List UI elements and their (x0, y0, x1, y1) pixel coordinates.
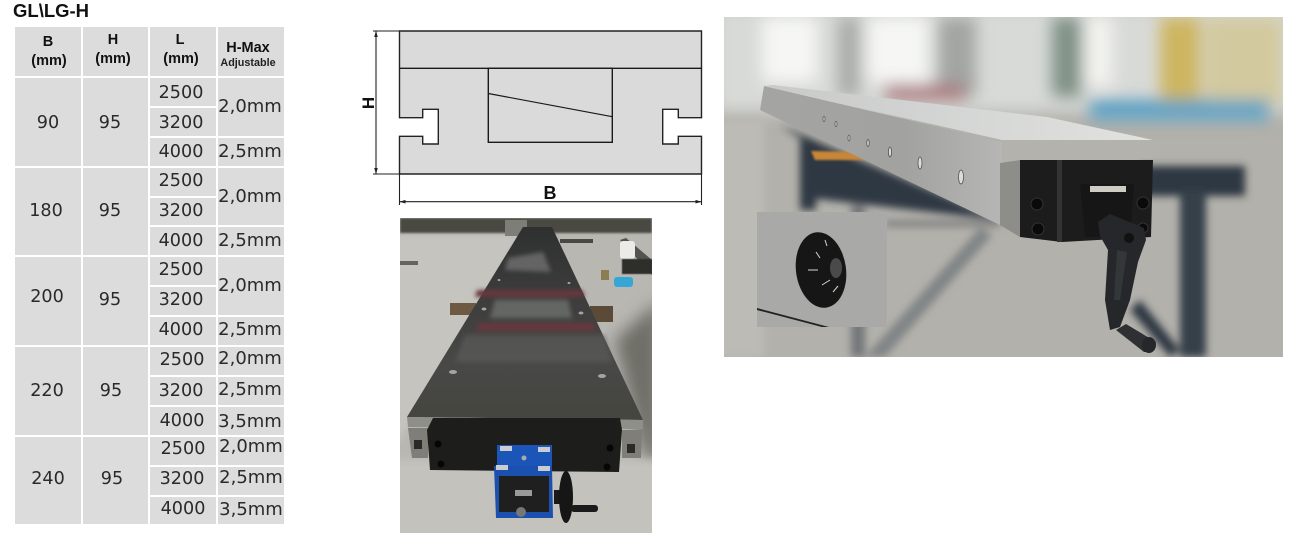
row group B 90: 95 (99, 113, 121, 133)
table header: B (43, 34, 53, 50)
row group B 240: 3,5mm (219, 499, 283, 520)
row group B 220: 2500 (160, 350, 204, 370)
row group B 90: 3200 (159, 113, 203, 133)
row group B 180: 2,5mm (218, 230, 282, 251)
row group B 180: 2,0mm (218, 186, 282, 207)
dimension H: H (359, 97, 378, 109)
hand wheel (554, 471, 598, 523)
row group B 220 (15, 347, 284, 435)
row group B 180: 95 (99, 201, 121, 221)
wooden supports (450, 303, 613, 322)
black end block (1020, 160, 1153, 242)
row group B 220: 220 (30, 381, 64, 401)
cross-section diagram (359, 31, 702, 205)
row group B 90: 2500 (159, 83, 203, 103)
row group B 240: 2,5mm (219, 467, 283, 488)
profile shape (400, 31, 702, 174)
row group B 90: 2,0mm (218, 96, 282, 117)
beam side face (760, 86, 1002, 225)
dimension H (359, 31, 400, 174)
beam end plate (1002, 140, 1153, 163)
reflections (455, 252, 612, 362)
row group B 180: 180 (29, 201, 63, 221)
photo: front view of table with blue gearbox (390, 218, 660, 540)
row group B 180 (15, 168, 284, 255)
blue gearbox (494, 445, 553, 518)
table header: Adjustable (220, 57, 276, 69)
front edge and lower plate (407, 417, 643, 458)
table header: (mm) (95, 51, 131, 67)
row group B 240: 2,0mm (219, 436, 283, 457)
row group B 240 (15, 436, 284, 524)
row group B 90: 4000 (159, 142, 203, 162)
table header: (mm) (163, 51, 199, 67)
blurred background (714, 7, 1293, 357)
row group B 220: 2,5mm (218, 379, 282, 400)
black end block (427, 418, 622, 472)
row group B 240: 95 (101, 469, 123, 489)
inset: adjustment dial (757, 212, 887, 327)
row group B 240: 4000 (161, 499, 205, 519)
row group B 200: 4000 (159, 320, 203, 340)
row group B 90: 2,5mm (218, 141, 282, 162)
table top surface (407, 227, 643, 420)
title: GL\LG-H (13, 0, 89, 21)
holes in side (823, 116, 964, 184)
row group B 200: 2,0mm (218, 275, 282, 296)
row group B 240: 3200 (160, 469, 204, 489)
beam top surface (764, 85, 1153, 140)
specification table (15, 27, 284, 524)
table header: H (108, 32, 118, 48)
row group B 200: 2,5mm (218, 319, 282, 340)
table frame (780, 125, 1245, 357)
row group B 200: 2500 (159, 260, 203, 280)
crank handle (1098, 214, 1156, 353)
table header: L (176, 32, 185, 48)
row group B 220: 2,0mm (218, 348, 282, 369)
row group B 200: 3200 (159, 290, 203, 310)
mounting holes (449, 279, 606, 378)
row group B 220: 4000 (160, 411, 204, 431)
row group B 200: 200 (30, 287, 64, 307)
row group B 240: 2500 (161, 439, 205, 459)
row group B 180: 2500 (159, 171, 203, 191)
row group B 180: 3200 (159, 201, 203, 221)
row group B 220: 3200 (159, 381, 203, 401)
dimension B (400, 174, 702, 205)
inner lines (400, 68, 702, 142)
dimension B: B (544, 183, 556, 203)
row group B 180: 4000 (159, 231, 203, 251)
table header: H-Max (226, 40, 270, 56)
photo: table end with hand crank (714, 7, 1293, 357)
orange bench edge (811, 151, 885, 160)
floor (400, 218, 652, 465)
table header (15, 27, 284, 76)
table header: (mm) (31, 53, 67, 69)
row group B 200: 95 (99, 290, 121, 310)
row group B 220: 3,5mm (218, 411, 282, 432)
row group B 240: 240 (31, 469, 65, 489)
background machinery (400, 218, 652, 287)
row group B 220: 95 (100, 381, 122, 401)
row group B 90: 90 (37, 113, 59, 133)
row group B 200 (15, 257, 284, 345)
row group B 90 (15, 78, 284, 166)
